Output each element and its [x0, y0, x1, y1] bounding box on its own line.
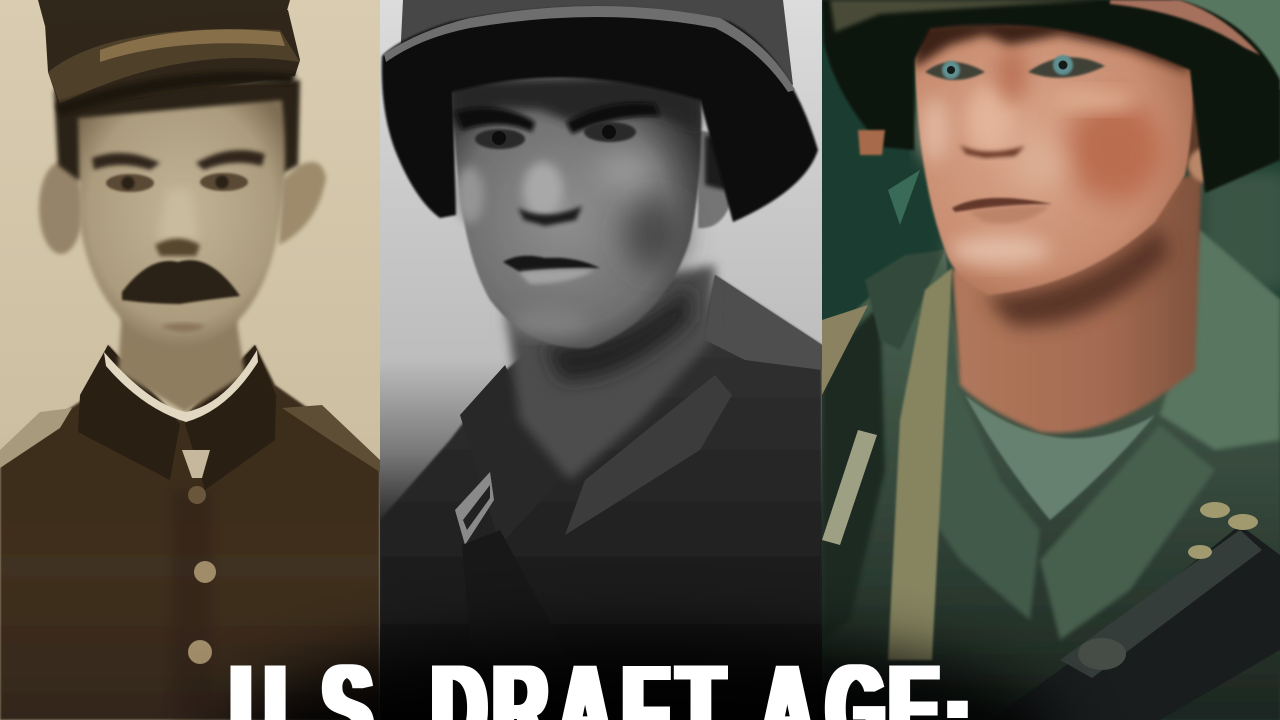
forehead and brow shadow [453, 72, 700, 134]
steel helmet [382, 0, 818, 222]
face [914, 20, 1193, 295]
bottom title shadow [220, 635, 1060, 720]
mouth [952, 198, 1052, 223]
tan shoulder strap [888, 268, 952, 660]
panel: soldier portrait, middle era black and white [380, 0, 822, 720]
t-shirt [965, 395, 1155, 520]
nose shadow [518, 206, 582, 226]
neck [952, 170, 1202, 433]
ear [696, 130, 730, 230]
eyes [475, 122, 636, 149]
shirt [380, 274, 822, 640]
ear [1186, 92, 1205, 185]
cheek and nose highlights [921, 47, 1165, 265]
forehead shadow [914, 16, 1190, 72]
mouth [503, 256, 600, 284]
buttons and collar pin [182, 450, 216, 664]
peaked cap [38, 0, 300, 116]
panel: soldier portrait, later era colour [822, 0, 1280, 720]
ears [39, 162, 326, 254]
nose highlight [161, 194, 194, 238]
face [453, 85, 701, 348]
eyes [925, 55, 1105, 80]
neck and white collar [104, 310, 258, 422]
panel: soldier portrait, early era sepia [0, 0, 380, 720]
uniform tunic [0, 345, 380, 720]
rifle [1026, 502, 1280, 720]
moustache [122, 260, 240, 304]
hair [54, 80, 300, 180]
helmet [822, 0, 1280, 193]
uniform [822, 230, 1280, 720]
nose shadow [155, 238, 200, 256]
blurred jungle background [888, 170, 1280, 290]
face [78, 100, 285, 347]
facial highlights [456, 150, 685, 335]
neck [505, 265, 715, 480]
nose shadow [960, 145, 1025, 158]
brows and eyes [92, 150, 265, 192]
